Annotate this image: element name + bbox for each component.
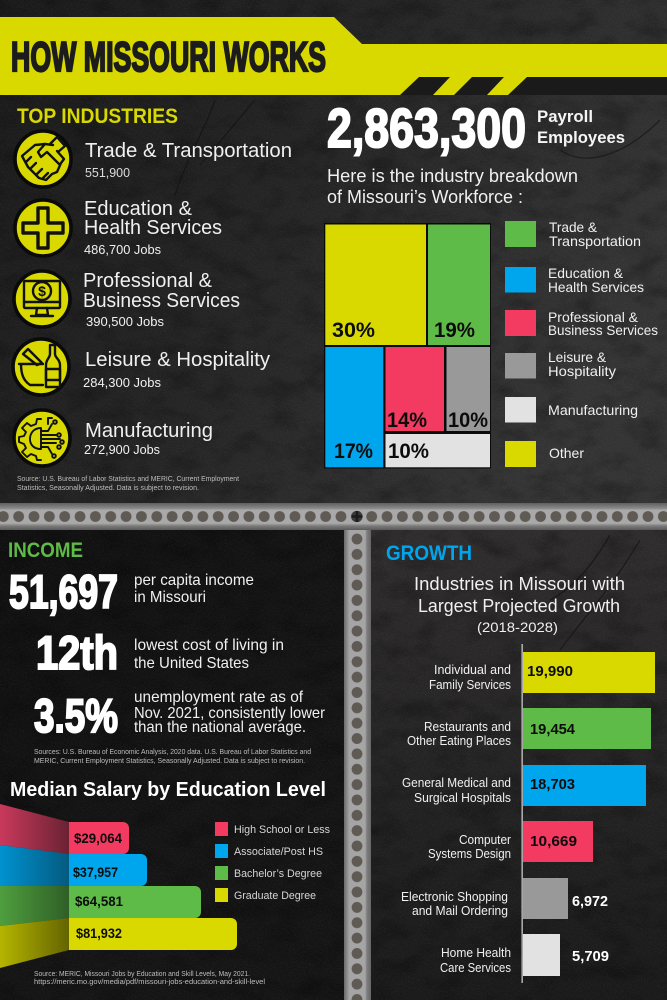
treemap chart: 19%: [434, 319, 475, 342]
panel: income: [8, 538, 326, 765]
stat: per capita income: per capita income: [134, 572, 254, 589]
trade text: 551,900: [85, 165, 130, 180]
trade text: Trade & Transportation: [85, 140, 292, 162]
title banner: [0, 17, 667, 95]
growth bar chart: Computer: [459, 833, 511, 847]
treemap chart: [324, 223, 491, 468]
professional text: [83, 270, 240, 329]
treemap legend: Leisure &: [548, 349, 607, 365]
manufacturing text: Manufacturing: [85, 420, 213, 442]
title: HOW MISSOURI WORKS: [11, 33, 326, 80]
trade text: [85, 140, 292, 180]
professional text: Business Services: [83, 290, 240, 312]
treemap legend: Other: [549, 445, 584, 461]
growth chart title: Industries in Missouri with: [414, 574, 625, 594]
growth bar chart: General Medical and: [402, 776, 511, 790]
panel: median salary: [0, 779, 330, 986]
stat: per capita income: in Missouri: [134, 589, 206, 606]
leisure text: [83, 349, 270, 390]
salary source: [34, 969, 265, 986]
treemap chart: 17%: [334, 440, 373, 463]
source note: [17, 474, 240, 492]
education text: 486,700 Jobs: [84, 242, 161, 257]
panel: workforce breakdown: [324, 97, 658, 468]
growth bar chart: Systems Design: [428, 847, 511, 861]
growth bar chart: [401, 644, 655, 983]
icon: gear circuit: [14, 410, 70, 466]
salary source: Source: MERIC, Missouri Jobs by Education and Skill Levels, May 2021.: [34, 969, 250, 978]
treemap legend: Trade &: [549, 219, 598, 235]
growth bar chart: 19,990: [527, 663, 573, 680]
stat: cost of living: [36, 626, 284, 679]
treemap legend: Transportation: [549, 233, 641, 249]
treemap chart: 10%: [388, 440, 429, 463]
education text: [84, 198, 222, 257]
growth bar chart: 19,454: [530, 721, 576, 738]
stat: per capita income: 51,697: [9, 565, 118, 618]
salary bars: $29,064: [74, 830, 122, 846]
treemap chart: 10%: [448, 409, 488, 432]
stat: unemployment: than the national average.: [134, 719, 306, 736]
heading: income: INCOME: [8, 538, 83, 562]
salary legend: Bachelor’s Degree: [234, 868, 322, 880]
growth chart title: (2018-2028): [477, 619, 558, 635]
breakdown intro: of Missouri’s Workforce :: [327, 186, 523, 207]
growth bar chart: Electronic Shopping: [401, 890, 508, 904]
payroll stat: 2,863,300: [327, 97, 526, 159]
payroll stat: Employees: [537, 128, 625, 147]
stat: cost of living: 12th: [36, 626, 118, 679]
growth bar chart: 5,709: [572, 948, 609, 965]
heading: growth: GROWTH: [386, 541, 472, 565]
panel: top industries: [13, 104, 292, 492]
banner stripes: [400, 77, 667, 95]
breakdown intro: Here is the industry breakdown: [327, 165, 578, 186]
treemap legend: Health Services: [548, 279, 644, 295]
stat: unemployment: 3.5%: [34, 689, 118, 742]
growth bar chart: Care Services: [440, 961, 511, 975]
salary source: https://meric.mo.gov/media/pdf/missouri-jobs-education-and-skill-level: [34, 977, 265, 986]
salary bars: $64,581: [75, 893, 123, 909]
treemap legend: Education &: [548, 265, 624, 281]
source note: Statistics, Seasonally Adjusted. Data is subject to revision.: [17, 483, 199, 492]
stat: unemployment: Nov. 2021, consistently lower: [134, 705, 326, 722]
icon: computer with dollar: [14, 271, 70, 327]
manufacturing text: [84, 420, 213, 457]
heading: top industries: TOP INDUSTRIES: [17, 104, 178, 128]
manufacturing text: 272,900 Jobs: [84, 442, 160, 457]
treemap chart: 30%: [332, 319, 375, 342]
growth bar chart: Other Eating Places: [407, 734, 511, 748]
treemap legend: [505, 219, 658, 467]
growth chart title: Largest Projected Growth: [418, 596, 620, 616]
income sources: MERIC, Current Employment Statistics, Seasonally Adjusted. Data is subject to revision.: [34, 756, 305, 765]
salary bars: $37,957: [73, 864, 118, 880]
treemap legend: Hospitality: [548, 363, 616, 379]
salary legend: Graduate Degree: [234, 890, 316, 902]
icon: computer with dollar: $: [38, 283, 46, 299]
stat: unemployment: unemployment rate as of: [134, 689, 304, 706]
salary legend: High School or Less: [234, 824, 330, 836]
heading: median salary: Median Salary by Education Level: [10, 779, 326, 801]
salary legend: Associate/Post HS: [234, 846, 323, 858]
treemap legend: Professional &: [548, 309, 639, 325]
icon: handshake: [15, 131, 71, 187]
growth chart title: [414, 574, 625, 635]
stat: unemployment: [34, 689, 326, 742]
treemap legend: Manufacturing: [548, 402, 638, 418]
stat: cost of living: the United States: [134, 655, 249, 672]
growth bar chart: 18,703: [530, 776, 575, 793]
leisure text: 284,300 Jobs: [83, 375, 161, 390]
growth bar chart: 6,972: [572, 893, 608, 910]
treemap legend: Business Services: [548, 322, 658, 338]
leisure text: Leisure & Hospitality: [85, 349, 270, 371]
growth bar chart: Restaurants and: [424, 720, 511, 734]
education text: Health Services: [84, 217, 222, 239]
stat: cost of living: lowest cost of living in: [134, 637, 284, 654]
icon: medical cross: [15, 200, 71, 256]
stat: per capita income: [9, 565, 254, 618]
growth bar chart: Home Health: [441, 946, 511, 960]
metal rail divider: [0, 503, 667, 1000]
salary bars: $81,932: [76, 925, 122, 941]
growth bar chart: Family Services: [429, 678, 511, 692]
education text: Education &: [84, 198, 193, 220]
professional text: 390,500 Jobs: [86, 314, 164, 329]
growth bar chart: Individual and: [434, 663, 511, 677]
treemap chart: 14%: [387, 409, 427, 432]
growth bar chart: 10,669: [530, 833, 577, 850]
payroll stat: Payroll: [537, 107, 593, 126]
growth bar chart: and Mail Ordering: [412, 904, 508, 918]
panel: growth: [386, 541, 655, 983]
income sources: [34, 747, 311, 765]
salary legend: [215, 822, 330, 902]
breakdown intro: [327, 165, 578, 207]
income sources: Sources: U.S. Bureau of Economic Analysis, 2020 data. U.S. Bureau of Labor Statistics and: [34, 747, 311, 756]
growth bar chart: Surgical Hospitals: [414, 791, 511, 805]
salary bars: [0, 804, 237, 968]
professional text: Professional &: [83, 270, 213, 292]
icon: mortar and bottle: [13, 339, 69, 395]
source note: Source: U.S. Bureau of Labor Statistics and MERIC, Current Employment: [17, 474, 240, 483]
